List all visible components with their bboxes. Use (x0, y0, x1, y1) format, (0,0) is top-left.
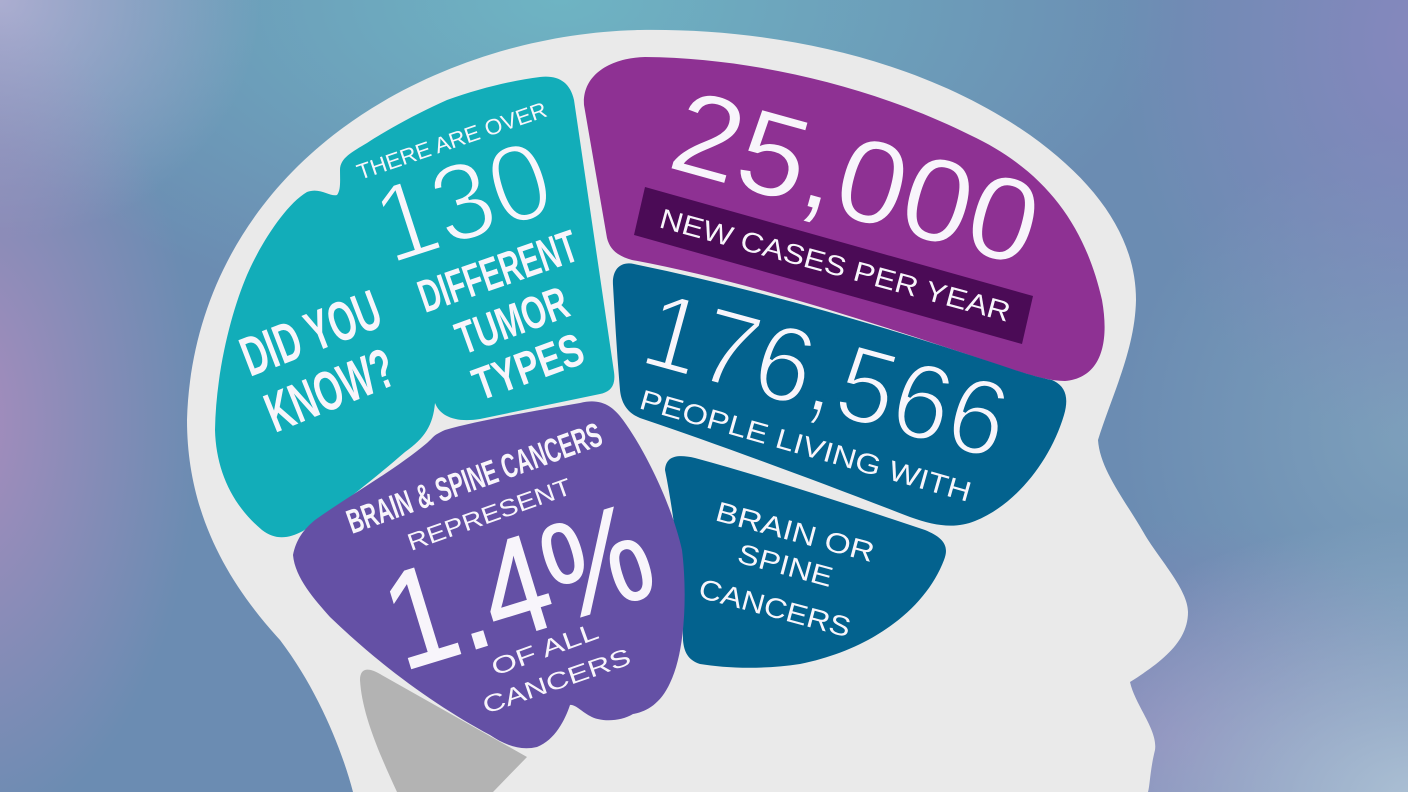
text: brain & spine cancers represent: BRAIN & SPINE CANCERS (342, 416, 607, 542)
text: different tumor types: DIFFERENT (411, 220, 584, 322)
text: brain or spine cancers: SPINE (734, 538, 836, 593)
text: different tumor types: TYPES (466, 323, 591, 410)
panel: teal lobe (215, 77, 614, 537)
text: people living with: PEOPLE LIVING WITH (636, 384, 975, 508)
text: did you know (232, 277, 404, 444)
text: brain or spine cancers: CANCERS (695, 573, 854, 643)
text: 1.4%: 1.4% (367, 473, 670, 700)
panel: purple lobe 25,000 (584, 57, 1105, 381)
head silhouette (187, 30, 1188, 792)
text: different tumor types: TUMOR (449, 276, 575, 364)
text: brain & spine cancers represent (342, 416, 607, 557)
text: did you know: KNOW? (256, 336, 404, 444)
text: of all cancers (479, 618, 635, 720)
panel: blue lobe 176,566 (613, 263, 1066, 526)
text: there are over 130: 130 (359, 116, 567, 288)
text: brain & spine cancers represent: REPRESENT (404, 473, 575, 557)
gray neck wedge (360, 670, 527, 792)
panel: blue lobe brain or spine (665, 456, 946, 668)
text: brain or spine cancers (695, 496, 878, 643)
text: of all cancers: CANCERS (479, 644, 635, 720)
panel: violet lobe (293, 401, 685, 748)
text: 176,566: 176,566 (631, 267, 1022, 482)
label box: new cases per year: NEW CASES PER YEAR (656, 203, 1014, 328)
text: brain or spine cancers: BRAIN OR (712, 496, 878, 568)
text: of all cancers: OF ALL (488, 618, 602, 682)
text: did you know: DID YOU (232, 277, 390, 388)
text: different tumor types (411, 220, 591, 410)
text: there are over 130: THERE ARE OVER (354, 97, 550, 185)
label box: new cases per year (634, 187, 1033, 344)
text: 25,000: 25,000 (658, 65, 1054, 292)
